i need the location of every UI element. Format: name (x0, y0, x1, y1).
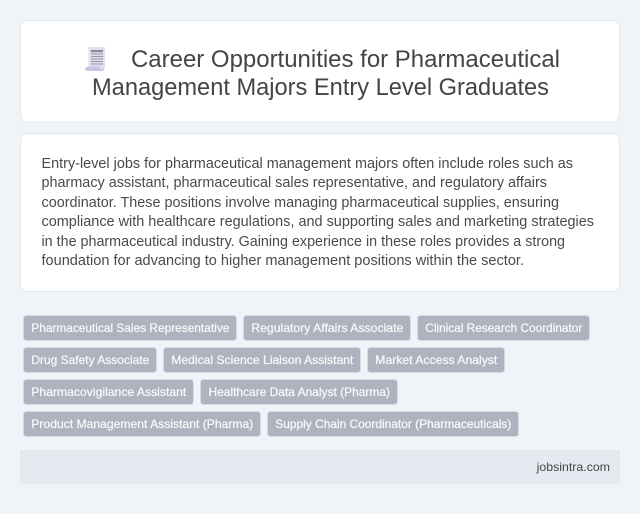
panel: description (20, 134, 620, 292)
tag: Clinical Research Coordinator: Clinical Research Coordinator (425, 321, 582, 335)
tag: Healthcare Data Analyst (Pharma) (200, 380, 398, 404)
text block: description paragraph: coordinator. These positions involve managing pharmaceutical supplies, ensuring (42, 195, 559, 211)
tag: Product Management Assistant (Pharma) (24, 412, 260, 436)
tag: Regulatory Affairs Associate: Regulatory Affairs Associate (251, 321, 404, 335)
footer source text: jobsintra.com (536, 460, 610, 474)
tag: Pharmacovigilance Assistant (24, 380, 194, 404)
tag: Healthcare Data Analyst (Pharma): Healthcare Data Analyst (Pharma) (208, 385, 390, 399)
text block: description paragraph: Entry-level jobs for pharmaceutical management majors often include roles such as (42, 156, 573, 172)
tag: Drug Safety Associate: Drug Safety Associate (31, 353, 150, 367)
tag: Medical Science Liaison Assistant: Medical Science Liaison Assistant (171, 353, 354, 367)
tag: Regulatory Affairs Associate (244, 316, 410, 340)
text block: description paragraph (42, 156, 594, 269)
tag: Supply Chain Coordinator (Pharmaceuticals): Supply Chain Coordinator (Pharmaceuticals) (275, 417, 511, 431)
job role tags (24, 316, 590, 436)
tag: Pharmacovigilance Assistant: Pharmacovigilance Assistant (31, 385, 187, 399)
tag: Market Access Analyst: Market Access Analyst (375, 353, 498, 367)
text block: description paragraph: pharmacy assistant, pharmaceutical sales representative, and regulatory affairs (42, 175, 547, 191)
tag: Supply Chain Coordinator (Pharmaceuticals) (268, 412, 518, 436)
icon: document scroll (85, 47, 105, 71)
text block: description paragraph: compliance with healthcare regulations, and supporting sales and marketing strategies (42, 214, 594, 230)
panel: title header (20, 20, 620, 122)
tag: Product Management Assistant (Pharma): Product Management Assistant (Pharma) (31, 417, 253, 431)
tag: Pharmaceutical Sales Representative: Pharmaceutical Sales Representative (31, 321, 230, 335)
tag: Medical Science Liaison Assistant (164, 348, 360, 372)
title: Career Opportunities for Pharmaceutical (131, 46, 560, 73)
title: Management Majors Entry Level Graduates (92, 74, 549, 101)
footer bar (20, 450, 620, 484)
text block: description paragraph: in the pharmaceutical industry. Gaining experience in these roles provides a strong (42, 234, 565, 250)
tag: Market Access Analyst (368, 348, 504, 372)
tag: Clinical Research Coordinator (418, 316, 590, 340)
text block: description paragraph: foundation for advancing to higher management positions within the sector. (42, 253, 524, 269)
title (92, 46, 560, 101)
tag: Drug Safety Associate (24, 348, 156, 372)
tag: Pharmaceutical Sales Representative (24, 316, 236, 340)
